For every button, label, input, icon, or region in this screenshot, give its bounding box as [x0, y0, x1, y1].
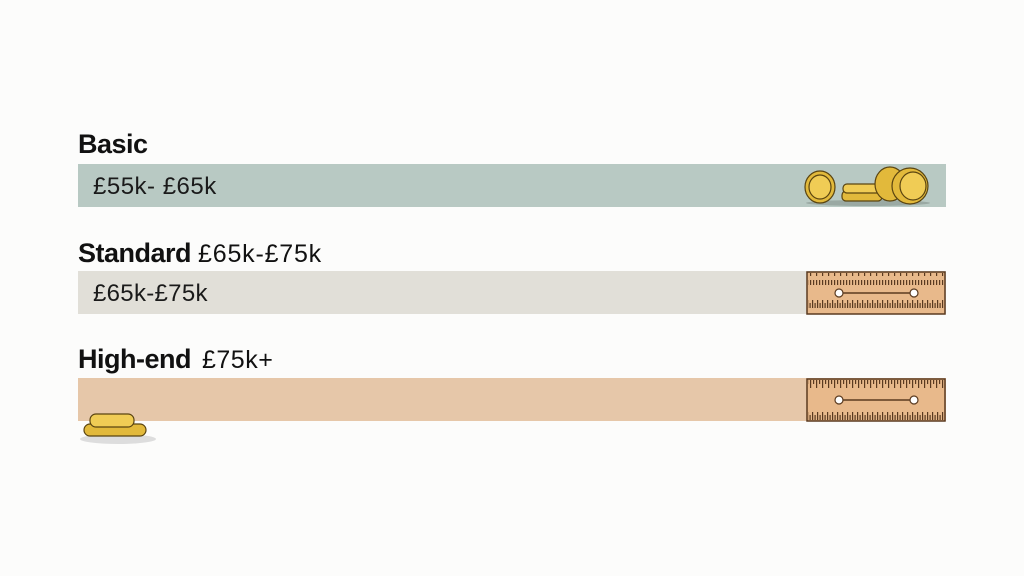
heading: High-end: High-end £75k+ [78, 344, 273, 374]
heading: Standard: Standard £65k-£75k [78, 238, 322, 268]
icon: coins [805, 167, 930, 206]
bar: Standard [78, 271, 946, 314]
heading: Basic: Basic [78, 129, 148, 159]
text: standard range: £65k-£75k [93, 280, 208, 307]
icon: coin stack [80, 414, 156, 444]
icon: ruler [807, 379, 945, 421]
text: basic range: £55k- £65k [93, 173, 217, 200]
bar: High-end [78, 378, 946, 421]
icon: ruler [807, 272, 945, 314]
bar: Basic [78, 164, 946, 207]
